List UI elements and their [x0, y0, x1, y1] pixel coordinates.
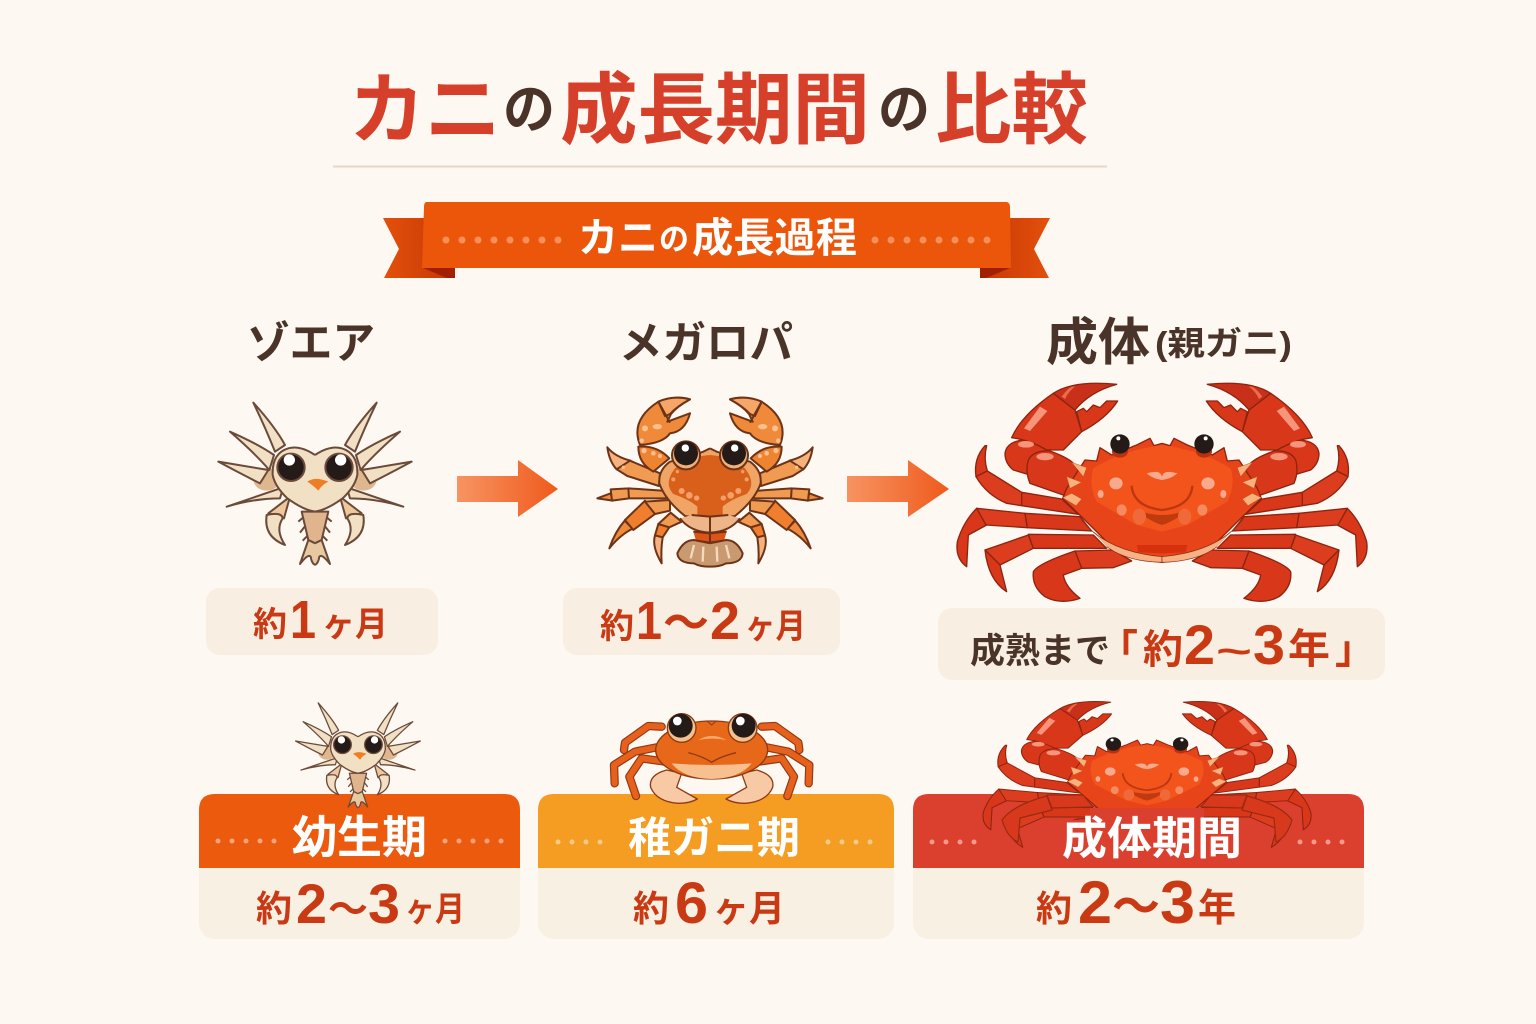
adult period value: 3 — [1160, 869, 1195, 936]
panel: adult period — [913, 794, 1364, 939]
title: 比較 — [935, 66, 1088, 154]
duration pill: zoea: 1 — [290, 590, 316, 650]
adult period header — [913, 794, 1364, 868]
icon: adult crab — [957, 383, 1367, 601]
juvenile period value card — [538, 830, 894, 939]
duration pill: adult maturity: 年 — [1288, 626, 1330, 672]
title: 成長期間 — [560, 66, 870, 154]
larval period value card — [199, 830, 520, 939]
duration pill: adult maturity: 「 — [1098, 628, 1138, 672]
stage heading: adult — [1046, 314, 1292, 371]
ribbon text: 成長過程 — [692, 215, 857, 261]
ribbon text: の — [659, 222, 689, 257]
ribbon folds — [423, 268, 1010, 278]
juvenile period heading: 稚ガニ期 — [628, 815, 800, 863]
title: の — [878, 80, 930, 140]
ribbon left tail — [383, 218, 447, 278]
duration pill: adult maturity: 2 — [1184, 613, 1215, 676]
stage heading: megalopa: メガロパ — [619, 319, 793, 368]
adult period dots — [930, 840, 1344, 844]
larval period heading: 幼生期 — [292, 812, 427, 863]
duration pill: megalopa: 〜 — [663, 597, 709, 649]
stage heading: adult: (親ガニ) — [1155, 325, 1292, 362]
larval period value: ヶ月 — [405, 891, 465, 929]
adult period value: 〜 — [1112, 881, 1160, 934]
ribbon heading — [383, 202, 1050, 278]
duration pill: adult maturity: ~ — [1216, 631, 1252, 673]
duration pill: adult maturity: 3 — [1253, 613, 1285, 676]
icon: megalopa crab — [597, 398, 823, 567]
duration pill: megalopa: 1 — [636, 591, 662, 651]
icon: juvenile crab — [614, 714, 809, 803]
stage heading: adult: 成体 — [1046, 314, 1150, 371]
duration pill: megalopa: 2 — [710, 591, 740, 651]
duration pill: adult maturity: 」 — [1335, 628, 1375, 672]
juvenile period value: 6 — [675, 871, 708, 936]
duration pill: zoea — [206, 588, 438, 655]
adult period value card — [913, 830, 1364, 939]
juvenile period value: ヶ月 — [713, 888, 785, 929]
icon: small zoea — [296, 703, 420, 808]
icon: zoea larva — [218, 403, 412, 565]
larval period value: 2 — [296, 872, 327, 935]
adult period value: 年 — [1198, 888, 1236, 930]
ribbon text — [578, 215, 857, 261]
duration pill: megalopa: 約 — [600, 608, 634, 646]
stage heading: zoea: ゾエア — [247, 319, 375, 368]
duration pill: megalopa: ヶ月 — [745, 608, 806, 646]
ribbon main band — [422, 202, 1011, 268]
juvenile period value — [633, 871, 785, 936]
arrow: zoea to megalopa — [457, 460, 558, 517]
title — [349, 66, 1088, 154]
duration pill: zoea: ヶ月 — [322, 606, 388, 644]
duration pill: adult maturity: 成熟まで — [970, 632, 1110, 671]
larval period value: 約 — [256, 888, 292, 929]
ribbon text: カニ — [578, 215, 658, 261]
arrow: megalopa to adult — [847, 460, 949, 517]
ribbon right tail — [986, 218, 1050, 278]
adult period value: 2 — [1078, 869, 1112, 936]
juvenile period value: 約 — [633, 888, 669, 929]
panel: larval period — [199, 794, 520, 939]
panel: juvenile period — [538, 794, 894, 939]
duration pill: adult maturity — [938, 608, 1385, 680]
duration pill: adult maturity: 約 — [1143, 628, 1183, 672]
larval period value: 〜 — [328, 888, 368, 932]
larval period value: 3 — [368, 872, 400, 935]
adult period value — [1036, 869, 1236, 936]
larval period value — [256, 872, 465, 935]
title: カニ — [349, 66, 501, 154]
larval period header — [199, 794, 520, 868]
juvenile period header — [538, 794, 894, 868]
duration pill: zoea: 約 — [253, 606, 287, 644]
ribbon dots — [442, 236, 990, 244]
juvenile period dots — [556, 840, 872, 844]
icon: small adult crab — [983, 701, 1311, 868]
adult period heading: 成体期間 — [1062, 813, 1242, 864]
adult period value: 約 — [1036, 888, 1072, 929]
larval period dots — [216, 838, 504, 844]
title: の — [503, 80, 555, 140]
duration pill: megalopa — [563, 588, 840, 655]
